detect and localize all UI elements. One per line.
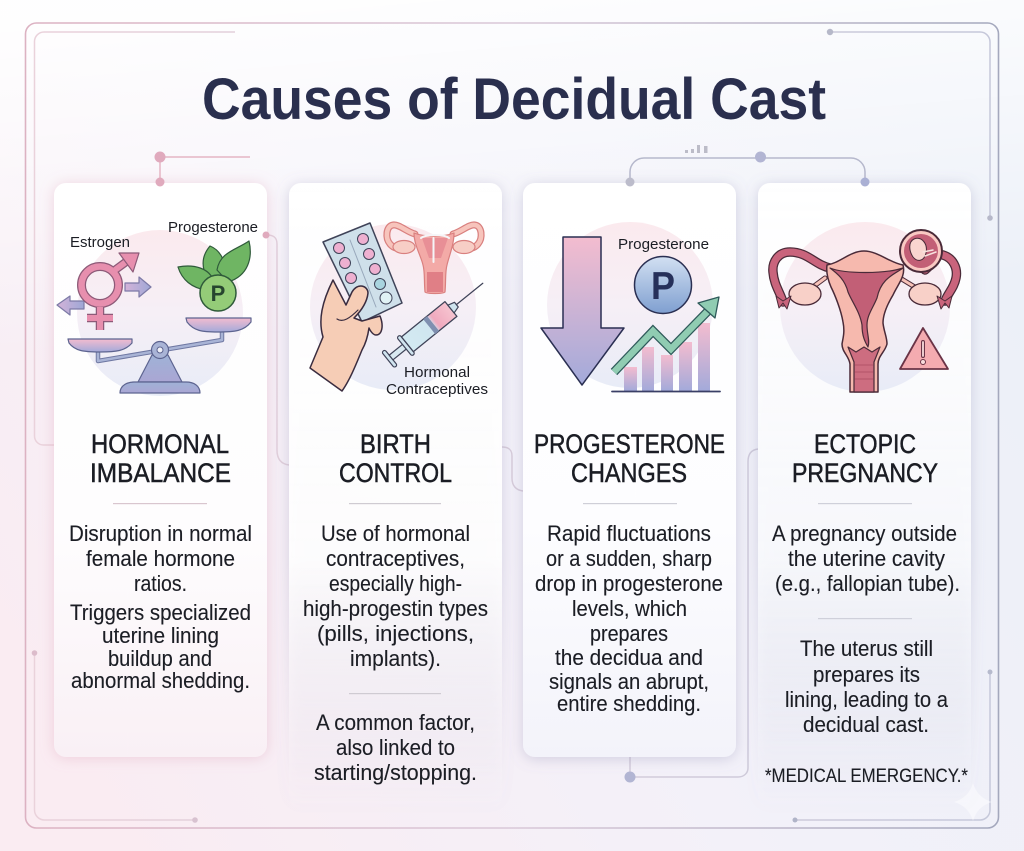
panel: hormonal imbalance bbox=[54, 183, 267, 757]
heading: CONTROL bbox=[339, 458, 452, 488]
body text: ratios. bbox=[134, 571, 187, 596]
icon: progesterone drop and chart bbox=[541, 222, 720, 392]
body text: (e.g., fallopian tube). bbox=[775, 571, 960, 596]
body text: the uterine cavity bbox=[788, 546, 946, 571]
heading: HORMONAL bbox=[91, 429, 229, 459]
icon: progesterone drop and chart: P bbox=[651, 265, 675, 308]
body text bbox=[535, 521, 723, 716]
body text: (pills, injections, bbox=[317, 621, 474, 646]
icon: uterus with ectopic pregnancy bbox=[773, 222, 956, 392]
icon: contraceptives bbox=[310, 223, 490, 398]
card background 2 bbox=[289, 183, 502, 808]
card background 4 bbox=[758, 183, 971, 808]
icon: contraceptives: Hormonal bbox=[404, 364, 470, 381]
body text: levels, which bbox=[572, 596, 687, 621]
sparkle mark bbox=[954, 783, 992, 821]
body text: contraceptives, bbox=[326, 546, 465, 571]
title: Causes of Decidual Cast bbox=[202, 67, 826, 132]
body text: the decidua and bbox=[555, 645, 703, 670]
body text: high-progestin types bbox=[303, 596, 488, 621]
body text: A common factor, bbox=[316, 710, 475, 735]
body text: uterine lining bbox=[102, 623, 219, 648]
body text: Disruption in normal bbox=[69, 521, 252, 546]
divider bbox=[818, 618, 912, 619]
icon: progesterone drop and chart: Progesterone bbox=[618, 236, 709, 253]
body text: starting/stopping. bbox=[314, 760, 477, 785]
icon: contraceptives: Contraceptives bbox=[386, 381, 488, 398]
heading: IMBALANCE bbox=[90, 458, 231, 488]
heading: ECTOPIC bbox=[814, 429, 916, 459]
body text: decidual cast. bbox=[803, 712, 929, 737]
body text: drop in progesterone bbox=[535, 571, 723, 596]
panel: birth control bbox=[289, 183, 502, 808]
body text: Triggers specialized bbox=[70, 600, 251, 625]
heading bbox=[534, 429, 725, 488]
body text bbox=[314, 710, 477, 785]
heading bbox=[90, 429, 231, 488]
heading bbox=[339, 429, 452, 488]
divider bbox=[818, 503, 912, 504]
medical emergency note: *MEDICAL EMERGENCY.* bbox=[765, 765, 968, 787]
divider bbox=[113, 503, 207, 504]
body text: Use of hormonal bbox=[321, 521, 470, 546]
heading: PREGNANCY bbox=[792, 458, 938, 488]
heading: CHANGES bbox=[571, 458, 687, 488]
body text bbox=[303, 521, 488, 671]
card background 3 bbox=[523, 183, 736, 757]
body text: abnormal shedding. bbox=[71, 668, 250, 693]
body text: The uterus still bbox=[800, 636, 933, 661]
heading: BIRTH bbox=[360, 429, 431, 459]
panel: ectopic pregnancy bbox=[758, 183, 971, 808]
body text: Rapid fluctuations bbox=[547, 521, 711, 546]
icon: hormone balance scale: Progesterone bbox=[168, 219, 258, 236]
divider bbox=[349, 693, 441, 694]
body text: buildup and bbox=[108, 646, 212, 671]
icon: hormone balance scale bbox=[57, 219, 258, 396]
divider bbox=[349, 503, 441, 504]
body text bbox=[772, 521, 960, 596]
body text: entire shedding. bbox=[557, 691, 701, 716]
card background 1 bbox=[54, 183, 267, 757]
body text: especially high- bbox=[329, 571, 462, 596]
body text bbox=[785, 636, 948, 737]
body text: implants). bbox=[350, 646, 441, 671]
heading: PROGESTERONE bbox=[534, 429, 725, 459]
heading bbox=[792, 429, 938, 488]
icon: hormone balance scale: Estrogen bbox=[70, 234, 130, 251]
icon: hormone balance scale: P bbox=[211, 281, 225, 306]
body text: prepares its bbox=[813, 662, 920, 687]
body text: A pregnancy outside bbox=[772, 521, 957, 546]
body text: lining, leading to a bbox=[785, 687, 948, 712]
divider bbox=[583, 503, 677, 504]
body text: also linked to bbox=[336, 735, 455, 760]
body text: prepares bbox=[590, 621, 668, 646]
body text: or a sudden, sharp bbox=[546, 546, 712, 571]
body text bbox=[69, 521, 252, 693]
panel: progesterone changes bbox=[523, 183, 736, 757]
body text: signals an abrupt, bbox=[549, 669, 709, 694]
body text: female hormone bbox=[86, 546, 235, 571]
